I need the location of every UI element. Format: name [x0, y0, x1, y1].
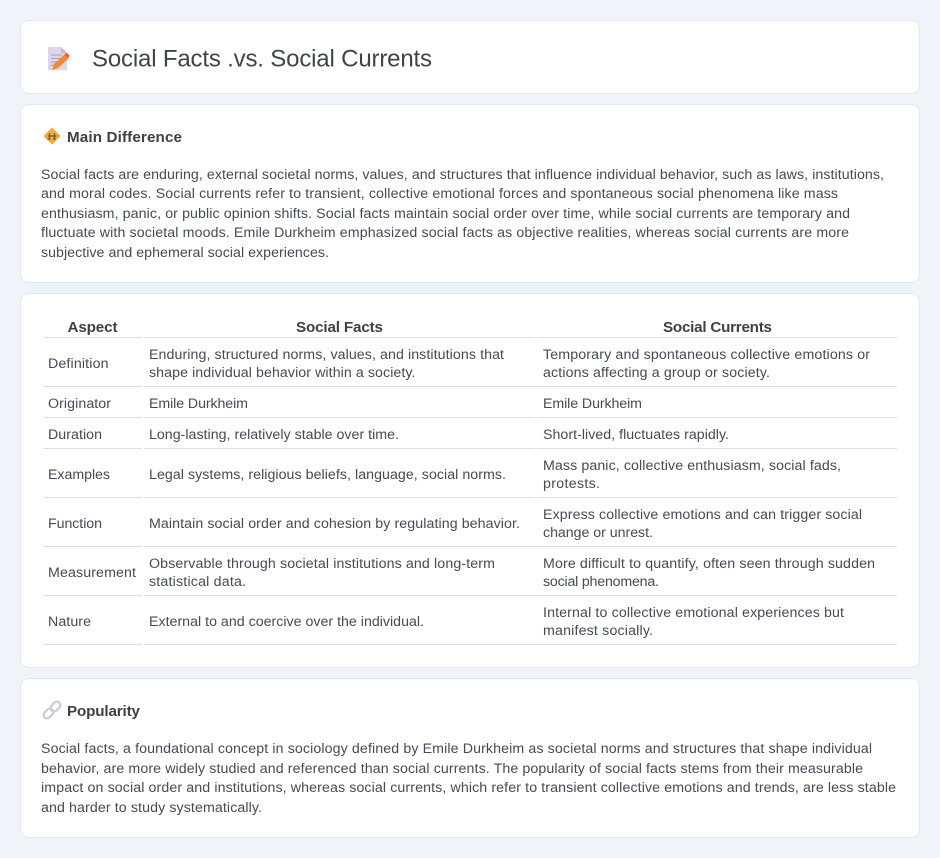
row: function: Express collective emotions and can trigger social	[543, 507, 862, 523]
table header row: Aspect	[68, 319, 118, 336]
row: examples: Legal systems, religious beliefs, language, social norms.	[149, 467, 506, 483]
row: definition: actions affecting a group or society.	[543, 365, 770, 381]
row: examples	[48, 458, 841, 492]
row: nature: External to and coercive over the individual.	[149, 614, 424, 630]
row: originator: Emile Durkheim	[543, 396, 642, 412]
icon: document with pencil	[48, 47, 70, 70]
row: nature: manifest socially.	[543, 623, 653, 639]
row: measurement	[48, 556, 875, 590]
heading: popularity: Popularity	[67, 703, 141, 720]
panel: title card	[20, 20, 920, 94]
row: nature: Internal to collective emotional experiences but	[543, 605, 844, 621]
row: function: change or unrest.	[543, 525, 653, 541]
text block: popularity paragraph	[41, 741, 896, 816]
row: function: Maintain social order and cohesion by regulating behavior.	[149, 516, 520, 532]
row: examples: protests.	[543, 476, 600, 492]
row: originator	[48, 396, 642, 412]
icon: chain link	[42, 700, 62, 720]
panel: main difference	[20, 104, 920, 282]
title: Social Facts .vs. Social Currents	[92, 46, 432, 72]
heading: main difference: Main Difference	[67, 129, 182, 146]
table header row: Social Currents	[663, 319, 772, 336]
row: duration: Duration	[48, 427, 102, 443]
row: measurement: Measurement	[48, 565, 136, 581]
text block: popularity paragraph: Social facts, a foundational concept in sociology defined by Emile Durkheim as societal norms and structures that shape individual	[41, 741, 872, 757]
row: duration: Short-lived, fluctuates rapidly.	[543, 427, 729, 443]
row: measurement: social phenomena.	[543, 574, 659, 590]
row: duration: Long-lasting, relatively stable over time.	[149, 427, 399, 443]
row: originator: Emile Durkheim	[149, 396, 248, 412]
table header row	[68, 319, 772, 336]
text block: popularity paragraph: behavior, are more widely studied and referenced than social currents. The popularity of social facts stems from their measurable	[41, 761, 863, 777]
text block: popularity paragraph: and harder to study systematically.	[41, 800, 262, 816]
row: measurement: statistical data.	[149, 574, 246, 590]
text block: main difference paragraph: subjective and ephemeral social experiences.	[41, 245, 329, 261]
row: definition: Temporary and spontaneous collective emotions or	[543, 347, 870, 363]
text block: main difference paragraph: fluctuate with societal moods. Emile Durkheim emphasized social facts as objective realities, whereas social currents are more	[41, 225, 849, 241]
row: definition: Enduring, structured norms, values, and institutions that	[149, 347, 504, 363]
row: definition: shape individual behavior within a society.	[149, 365, 416, 381]
row: nature: Nature	[48, 614, 91, 630]
row: examples: Examples	[48, 467, 110, 483]
text block: main difference paragraph: and moral codes. Social currents refer to transient, collective emotional forces and spontaneous social phenomena like mass	[41, 186, 838, 202]
row: measurement: Observable through societal institutions and long-term	[149, 556, 495, 572]
row: function	[48, 507, 862, 541]
row: measurement: More difficult to quantify, often seen through sudden	[543, 556, 875, 572]
panel: comparison table	[20, 294, 920, 668]
text block: popularity paragraph: impact on social order and institutions, whereas social currents, which refer to transient collective emotions and trends, are less stable	[41, 780, 896, 796]
row: definition: Definition	[48, 356, 108, 372]
icon: warning diamond	[44, 128, 60, 144]
row: duration	[48, 427, 729, 443]
text block: main difference paragraph	[41, 167, 884, 261]
row: originator: Originator	[48, 396, 111, 412]
text block: main difference paragraph: enthusiasm, panic, or public opinion shifts. Social facts maintain social order over time, while social currents are temporary and	[41, 206, 850, 222]
panel: popularity	[20, 678, 920, 838]
row: examples: Mass panic, collective enthusiasm, social fads,	[543, 458, 841, 474]
row: nature	[48, 605, 844, 639]
text block: main difference paragraph: Social facts are enduring, external societal norms, values, and structures that influence individual behavior, such as laws, institutions,	[41, 167, 884, 183]
row: definition	[48, 347, 870, 381]
row: function: Function	[48, 516, 102, 532]
table header row: Social Facts	[296, 319, 383, 336]
